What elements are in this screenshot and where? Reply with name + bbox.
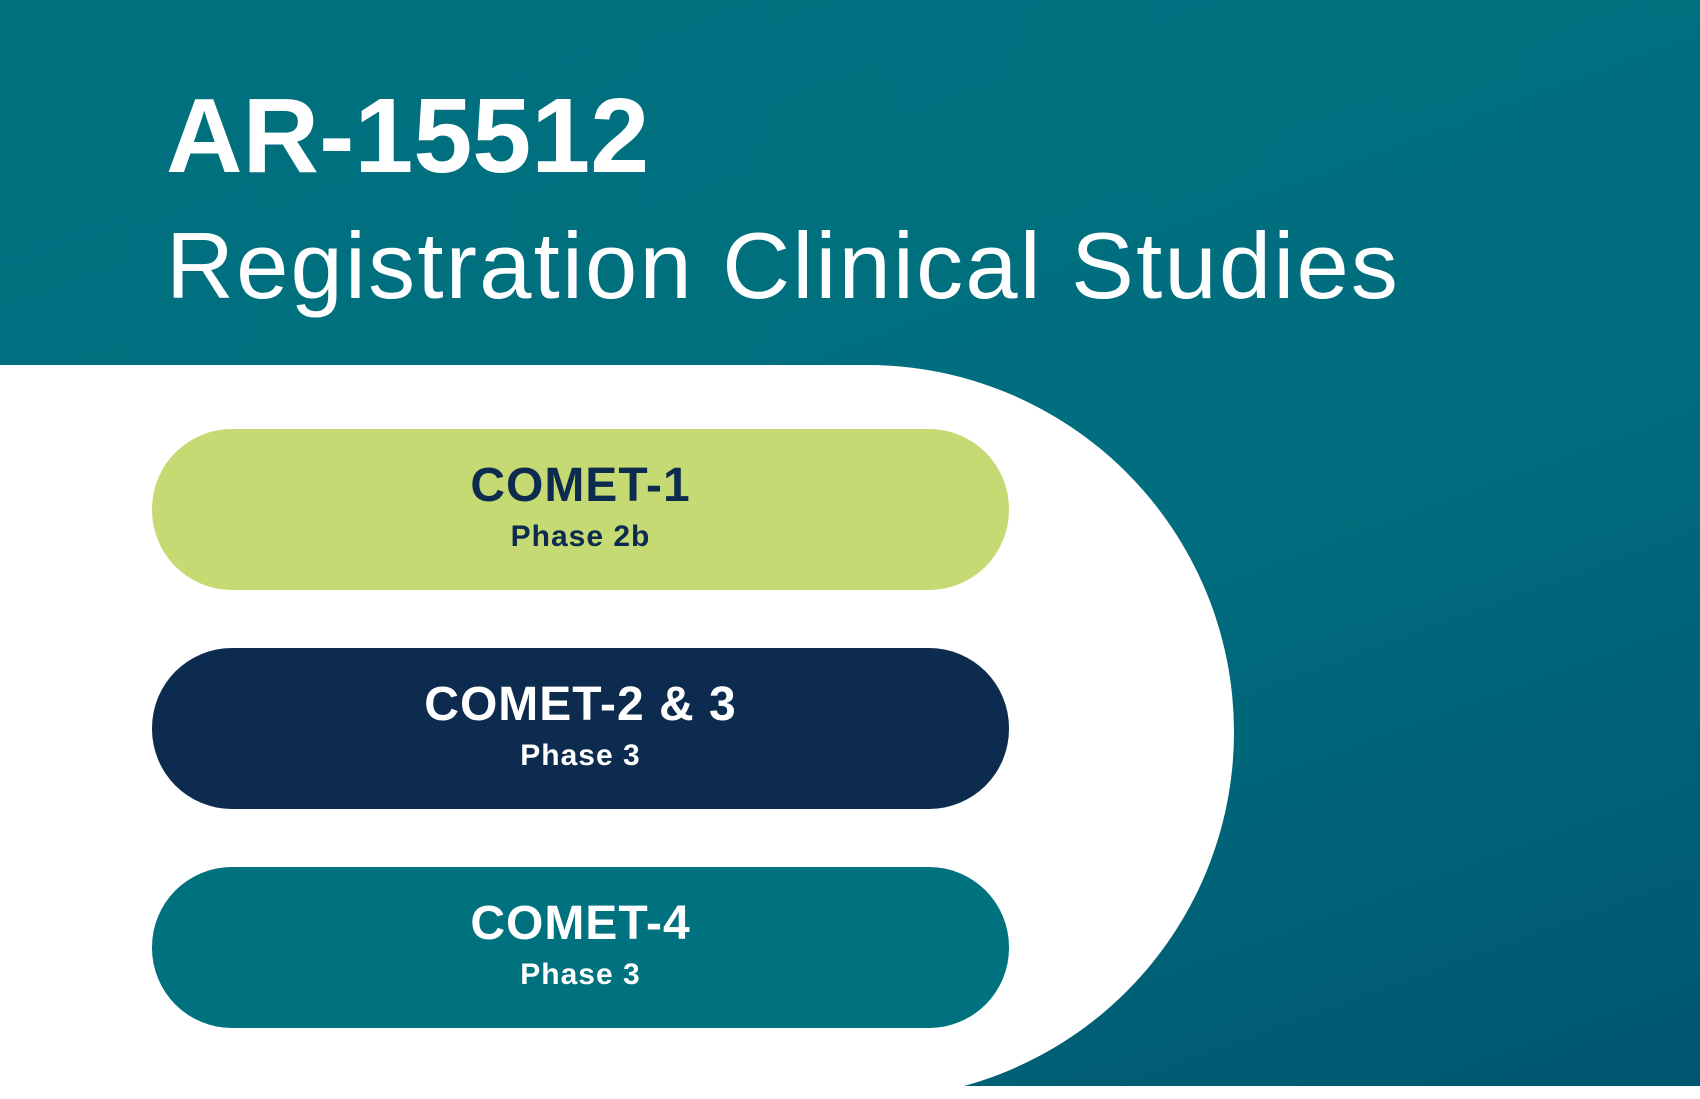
pill: COMET-1: Phase 2b <box>511 520 650 553</box>
pill: COMET-1 <box>152 429 1009 590</box>
pill: COMET-4 <box>152 867 1009 1028</box>
pill: COMET-4: COMET-4 <box>470 897 691 950</box>
subtitle: Registration Clinical Studies <box>166 213 1400 318</box>
pill: COMET-2 & 3: Phase 3 <box>520 739 641 772</box>
pill: COMET-2 & 3 <box>152 648 1009 809</box>
pill: COMET-4: Phase 3 <box>520 958 641 991</box>
white rounded panel <box>0 365 1234 1086</box>
title: AR-15512 <box>166 77 649 195</box>
pill: COMET-1: COMET-1 <box>470 459 691 512</box>
pill: COMET-2 & 3: COMET-2 & 3 <box>424 678 737 731</box>
